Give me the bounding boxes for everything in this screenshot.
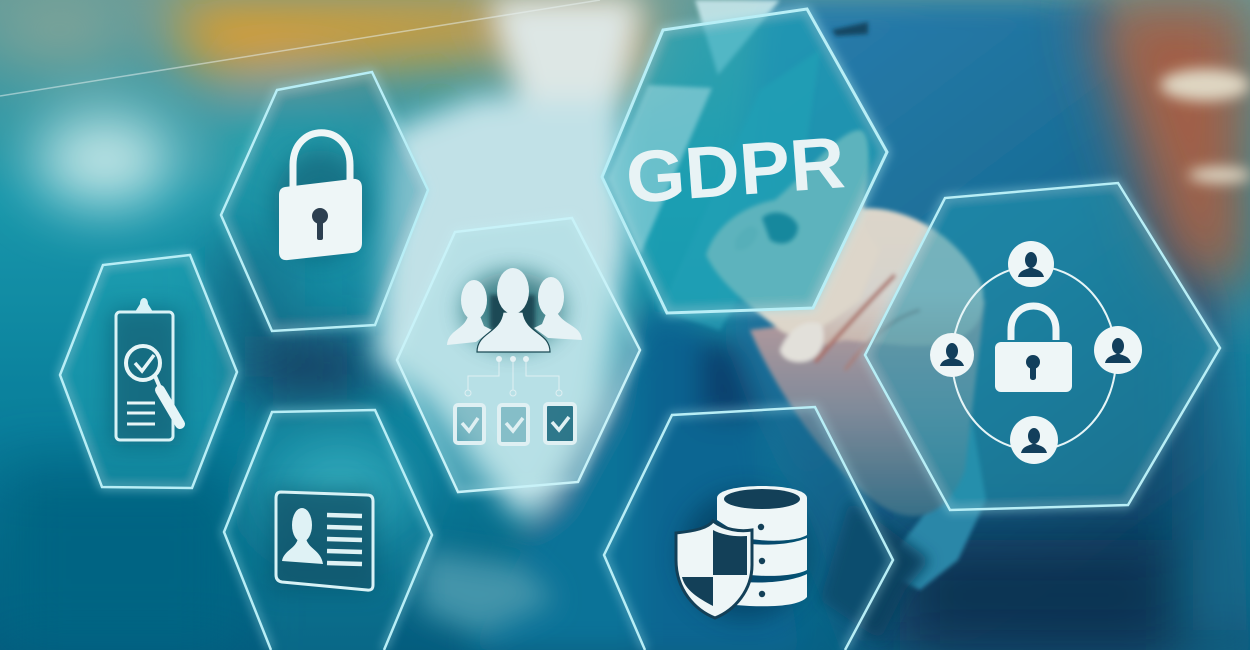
hexagon: GDPR — [602, 9, 887, 313]
hexagon: database shield — [604, 407, 893, 650]
suit lapel and shirt edge — [660, 50, 820, 330]
hexagon: people — [397, 218, 640, 492]
icon: padlock — [274, 133, 366, 260]
icon: clipboard with magnifier — [110, 298, 180, 445]
sleeve and cuff — [901, 425, 986, 592]
hexagon: id card — [224, 410, 432, 650]
hexagon: clipboard audit — [60, 255, 237, 488]
hexagon: network lock — [865, 183, 1220, 510]
icon: group and checkboxes — [447, 268, 582, 444]
thin diagonal light line — [0, 0, 600, 96]
icon: lock with connected users — [930, 241, 1142, 464]
icon: id card — [270, 490, 375, 590]
hexagon: lock — [221, 72, 428, 331]
heading: GDPR: GDPR — [623, 122, 848, 219]
icon: database and shield — [676, 486, 810, 620]
hand holding pen — [706, 130, 985, 516]
